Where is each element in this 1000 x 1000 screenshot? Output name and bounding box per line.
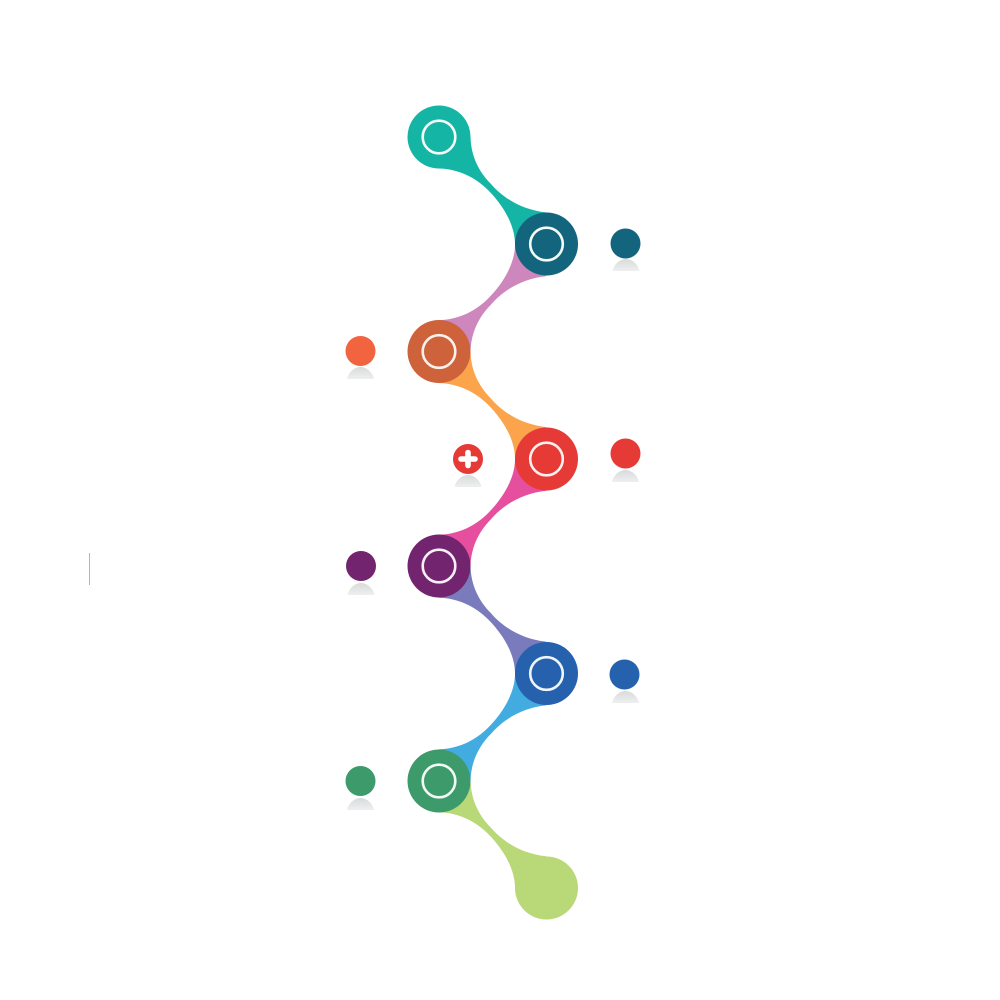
left edge tick line <box>89 553 90 585</box>
small dot: green with shadow <box>346 766 376 810</box>
small dot: blue with shadow <box>610 660 640 703</box>
connector: lime teardrop end <box>439 781 578 920</box>
node 7: green <box>408 750 470 812</box>
connector: magenta <box>439 459 546 566</box>
node 6: blue <box>515 642 578 705</box>
small dot: purple with shadow <box>346 551 376 595</box>
node 5: purple <box>408 534 470 598</box>
node 4: red <box>515 428 578 490</box>
small dot: dark teal with shadow <box>610 228 640 271</box>
connector: periwinkle <box>439 566 546 673</box>
icon: red plus button with shadow <box>453 444 483 487</box>
small dot: red with shadow <box>610 438 640 482</box>
connector: orange <box>439 352 546 459</box>
small dot: coral with shadow <box>346 336 376 379</box>
node 3: burnt orange <box>408 320 470 383</box>
node 2: dark teal <box>515 212 578 276</box>
connector: sky blue <box>439 674 546 781</box>
node 1: teal ring <box>423 121 455 153</box>
connector: pink <box>439 245 546 352</box>
connector: teal teardrop start <box>408 106 546 244</box>
